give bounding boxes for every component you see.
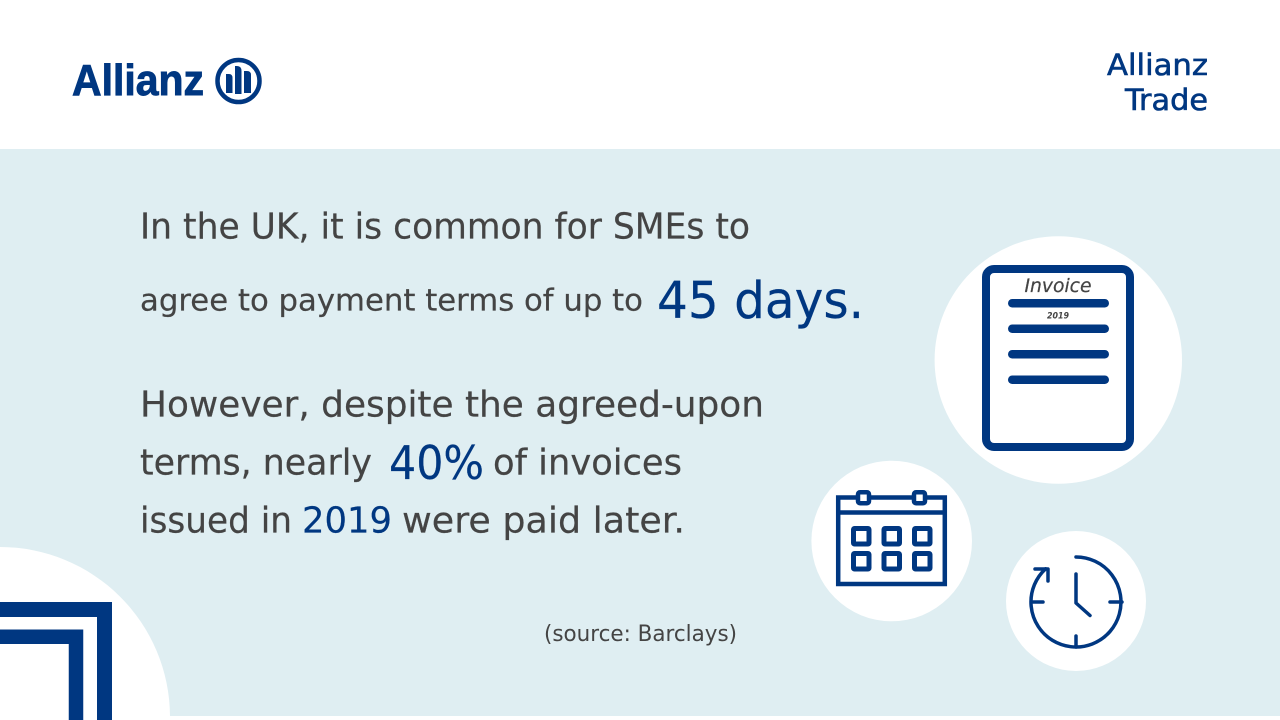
heading: Allianz Trade: Trade [1124, 83, 1208, 117]
text block: payment terms: In the UK, it is common for SMEs to [140, 206, 750, 248]
highlight: 2019: 2019 [302, 500, 392, 542]
text block: payment terms: agree to payment terms of up to [140, 284, 643, 318]
icon: clock with arrow [1006, 531, 1146, 671]
text block: late invoices: of invoices [493, 442, 682, 484]
icon: calendar [811, 461, 972, 621]
icon: invoice document: 2019 [1047, 312, 1069, 322]
icon: invoice document [935, 236, 1182, 484]
icon: Allianz eagle roundel [218, 60, 260, 102]
icon: invoice document: Invoice [1024, 275, 1092, 297]
highlight: 45 days: 45 days. [657, 272, 864, 331]
text block: payment terms [140, 206, 864, 331]
text block: late invoices: issued in [140, 500, 292, 542]
logo: Allianz: Allianz [72, 56, 204, 105]
text block: late invoices [140, 384, 764, 542]
text block: late invoices: However, despite the agreed-upon [140, 384, 764, 426]
corner decoration: white quarter circle with blue frames [0, 547, 170, 720]
text block: late invoices: were paid later. [402, 500, 685, 542]
source note: (source: Barclays) [544, 622, 737, 647]
text block: late invoices: terms, nearly [140, 442, 372, 484]
highlight: 40%: 40% [389, 436, 484, 490]
heading: Allianz Trade: Allianz [1107, 48, 1208, 82]
panel: pale blue background [0, 149, 1280, 716]
heading: Allianz Trade [1107, 48, 1208, 117]
